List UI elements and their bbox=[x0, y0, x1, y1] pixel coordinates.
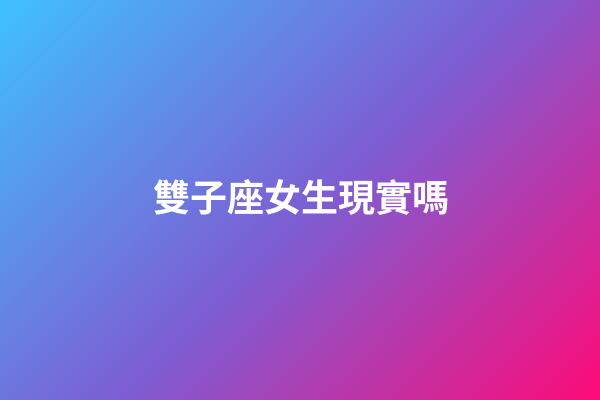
title: 雙子座女生現實嗎 bbox=[153, 178, 449, 219]
